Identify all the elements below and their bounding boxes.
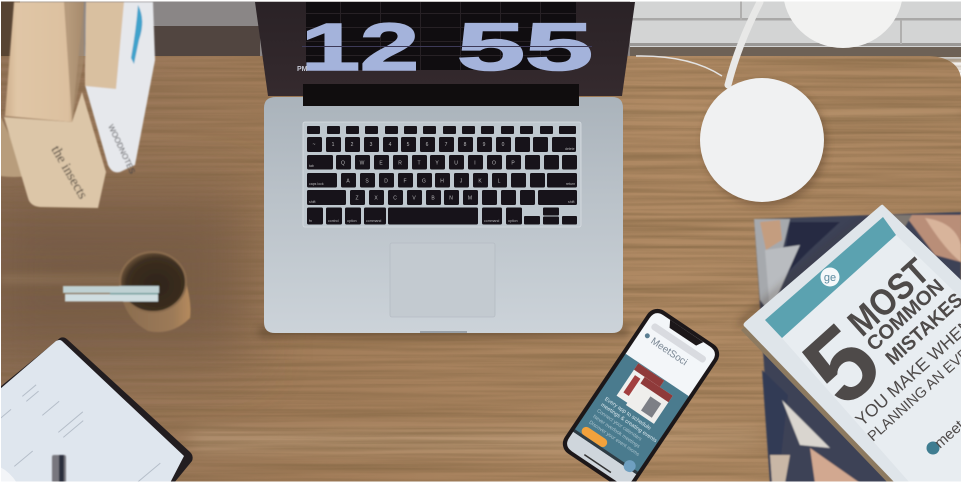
keyboard: return: [566, 182, 575, 186]
clock digits: 55: [457, 10, 593, 85]
key legends: X: [374, 196, 378, 202]
key legends: A: [346, 178, 350, 184]
key legends: 1: [332, 142, 335, 148]
key legends: B: [431, 196, 435, 202]
key legends: H: [440, 178, 444, 184]
key legends: U: [454, 160, 458, 166]
keyboard: delete: [565, 147, 575, 151]
keyboard: shift: [309, 200, 315, 204]
smartphone: [558, 304, 724, 483]
lamp base shadow: [703, 82, 827, 206]
key legends: S: [365, 178, 369, 184]
laptop hinge: [303, 84, 579, 106]
book: the insects: [4, 2, 106, 208]
key legends: Q: [341, 160, 345, 166]
desk lamp: [636, 0, 903, 206]
pen on notebook: [52, 455, 66, 483]
key legends: K: [478, 178, 482, 184]
pencil cup: [63, 252, 190, 332]
book: the insects: the insects: [48, 144, 90, 202]
key legends: 4: [389, 142, 392, 148]
book page panel: [782, 235, 961, 483]
key legends: C: [393, 196, 397, 202]
band logo: [820, 268, 840, 286]
magazine under book: [754, 212, 961, 483]
book spine edge: [741, 326, 897, 483]
brick wall background: [0, 0, 961, 120]
key legends: Y: [435, 160, 439, 166]
reflected keyboard: [306, 2, 576, 70]
clock digits: [301, 10, 593, 85]
phone orange button: [580, 425, 609, 449]
cover heading: MOST: [840, 250, 937, 344]
laptop shadow: [258, 326, 630, 338]
key legends: D: [384, 178, 388, 184]
key legends: G: [422, 178, 426, 184]
lamp arm: [728, 2, 760, 85]
lamp base: [700, 78, 824, 202]
key legends: 5: [407, 142, 410, 148]
laptop trackpad: [390, 243, 495, 317]
key legends: E: [379, 160, 383, 166]
stack of books: [0, 2, 155, 208]
phone promo text: Every app to schedule: [603, 396, 652, 432]
keyboard: fn: [309, 219, 312, 223]
keyboard: command: [366, 219, 381, 223]
phone promo text: Never overlook meetings: [592, 414, 641, 450]
key legends: 3: [370, 142, 373, 148]
lamp head: [783, 0, 903, 48]
key legends: 8: [464, 142, 467, 148]
keyboard: tab: [309, 164, 314, 168]
keyboard: command: [484, 219, 499, 223]
key legends: Z: [355, 196, 359, 202]
phone toolbar: [564, 432, 636, 483]
clock digits: 12: [301, 10, 419, 85]
book shadow: [738, 205, 880, 328]
key legends: F: [403, 178, 407, 184]
key legends: [313, 142, 515, 202]
laptop: [255, 2, 635, 338]
phone promo text: Discover your event rooms: [588, 420, 641, 458]
pens: [63, 286, 159, 302]
phone chat bubble: [621, 458, 638, 474]
phone browser header: [625, 310, 718, 397]
keyboard: option: [347, 219, 357, 223]
key legends: 6: [426, 142, 429, 148]
key legends: R: [398, 160, 402, 166]
book: white paperback: WOODNOTES: [106, 123, 137, 175]
phone promo text: meetings & creating events: [599, 402, 658, 444]
key legends: N: [449, 196, 453, 202]
book cover: [744, 205, 961, 483]
address bar: [641, 322, 707, 376]
key legends: L: [498, 178, 501, 184]
book behind: [0, 115, 28, 177]
phone home bar: [584, 454, 611, 473]
phone promo text: [588, 396, 662, 462]
notebook page fold: [0, 467, 17, 483]
keyboard: shift: [568, 200, 574, 204]
function key row: [307, 126, 576, 134]
cover heading: COMMON: [863, 275, 949, 356]
key legends: O: [492, 160, 496, 166]
keyboard: option: [508, 219, 518, 223]
key legends: 0: [502, 142, 505, 148]
key legends: M: [468, 196, 472, 202]
lamp cable: [636, 56, 722, 76]
notebook: [0, 337, 193, 483]
key legends: ~: [313, 142, 316, 148]
key legends: J: [460, 178, 463, 184]
laptop screen: [255, 2, 635, 96]
key legends: T: [417, 160, 421, 166]
key legends: 2: [351, 142, 354, 148]
phone body: [558, 304, 724, 483]
key legends: 7: [445, 142, 448, 148]
keyboard: [303, 122, 581, 227]
shift key row: [307, 190, 577, 205]
PM label: PM: [297, 66, 308, 73]
laptop base: [264, 97, 623, 333]
keyboard: caps lock: [309, 182, 324, 186]
cover teal band: [765, 217, 896, 338]
phone promo text: Connect your calendars: [595, 408, 643, 443]
bottom key row: [307, 208, 577, 224]
phone notch: [666, 320, 703, 348]
cover heading: 5: [782, 303, 902, 428]
address bar: MeetSoci: [648, 336, 689, 368]
key legends: P: [511, 160, 515, 166]
band logo: ge: [824, 272, 836, 284]
key legends: W: [360, 160, 365, 166]
key legends: V: [412, 196, 416, 202]
notebook text lines: [0, 384, 161, 483]
QWERTY key row: [307, 155, 577, 170]
cover heading: [782, 250, 961, 445]
ebook: 5 most common mistakes: [738, 205, 961, 483]
key legends: 9: [483, 142, 486, 148]
book: white paperback: [85, 2, 155, 175]
phone teal content: [574, 354, 689, 472]
keyboard: control: [328, 219, 339, 223]
phone product image: [615, 363, 677, 424]
home key row: [307, 173, 577, 188]
number key row: [307, 137, 576, 152]
key legends: I: [474, 160, 476, 166]
